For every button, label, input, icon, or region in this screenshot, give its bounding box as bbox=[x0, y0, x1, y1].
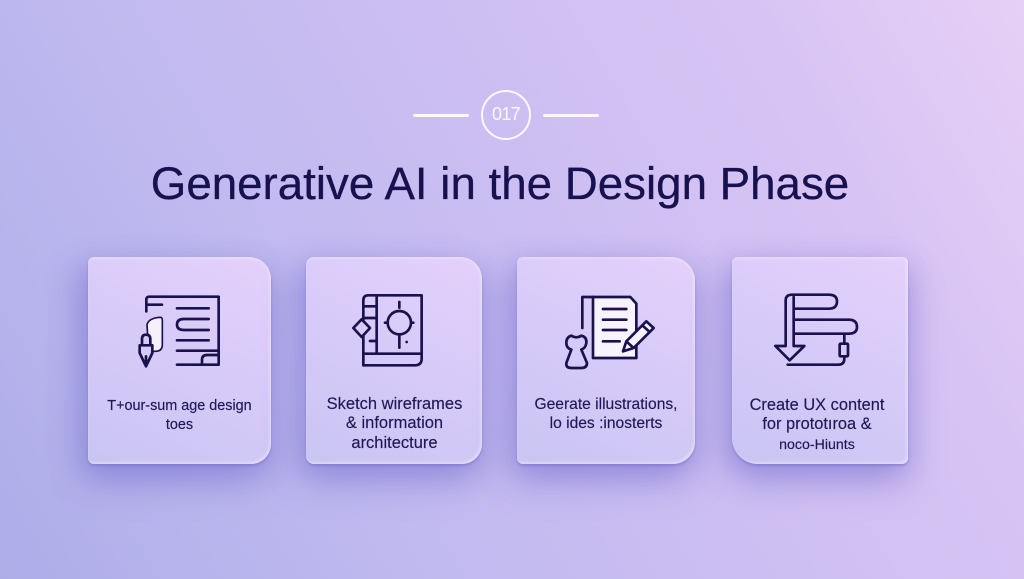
text: card 4 caption: noco-Hiunts bbox=[779, 437, 855, 453]
icon: blueprint book bbox=[352, 294, 423, 367]
icon: document with pen bbox=[138, 295, 220, 368]
text: card 4 caption: for prototıroa & bbox=[762, 415, 872, 433]
text: card 4 caption: Create UX content bbox=[750, 396, 884, 414]
text: card 2 caption: & information bbox=[346, 414, 443, 432]
text: card 4 caption bbox=[750, 396, 884, 453]
text: card 3 caption: Geerate illustrations, bbox=[534, 396, 678, 413]
panel: card 4 UX content bbox=[732, 257, 908, 464]
icon: flow with down arrow bbox=[774, 293, 858, 366]
title: Generative AI in the Design Phase bbox=[151, 158, 849, 209]
panel: card 3 illustrations bbox=[517, 257, 695, 464]
header badge: number with flanking lines bbox=[413, 90, 599, 140]
text: card 1 caption bbox=[107, 398, 252, 433]
number circle bbox=[481, 90, 531, 140]
icon: paper, pencil and figure bbox=[564, 296, 656, 370]
text: card 2 caption: architecture bbox=[351, 434, 438, 452]
text: card 3 caption bbox=[534, 396, 678, 432]
left line bbox=[413, 114, 469, 117]
number circle: 017 bbox=[492, 104, 520, 124]
text: card 1 caption: toes bbox=[166, 417, 193, 433]
text: card 2 caption: Sketch wireframes bbox=[327, 395, 462, 413]
right line bbox=[543, 114, 599, 117]
text: card 3 caption: lo ides :inosterts bbox=[550, 415, 662, 432]
panel: card 2 wireframes bbox=[306, 257, 482, 464]
text: card 1 caption: T+our-sum age design bbox=[107, 398, 252, 414]
text: card 2 caption bbox=[327, 395, 462, 452]
panel: card 1 design tools bbox=[88, 257, 271, 464]
